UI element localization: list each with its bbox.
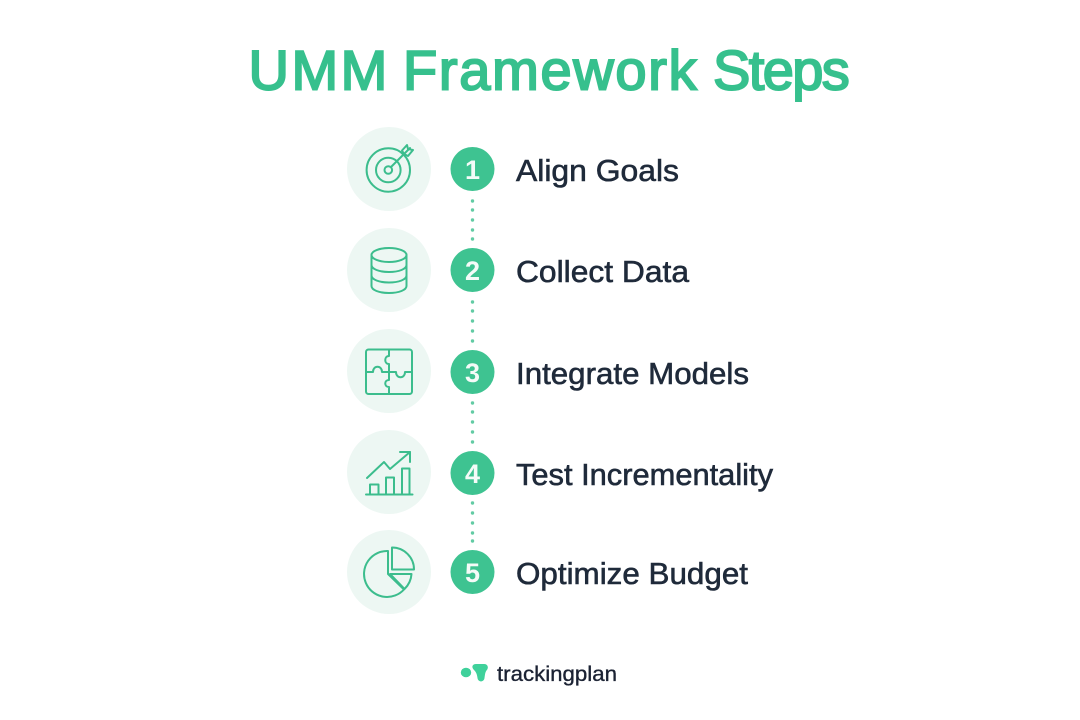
icon: target with arrow [347,127,431,211]
connector dots 2 to 3 [471,300,474,343]
number badge 3 [450,350,494,394]
number badge 5: 5 [465,558,480,588]
title: Framework [403,38,698,102]
step 4: test incrementality [347,430,773,514]
step 2: collect data [347,228,690,312]
icon: rising bar chart [347,430,431,514]
number badge 5 [450,550,494,594]
step 5: optimize budget [347,530,748,614]
number badge 2 [450,248,494,292]
label: collect data: Collect Data [516,254,690,289]
title: UMM [248,38,390,102]
connector dots 4 to 5 [471,501,474,543]
number badge 1 [450,147,494,191]
step 1: align goals [347,127,679,211]
number badge 3: 3 [465,358,480,388]
label: align goals: Align Goals [516,153,679,188]
number badge 2: 2 [465,256,480,286]
icon: logo mark [461,664,488,681]
number badge 4 [450,451,494,495]
label: optimize budget: Optimize Budget [516,556,748,591]
step 3: integrate models [347,329,749,413]
number badge 4: 4 [465,459,480,489]
number badge 1: 1 [465,155,480,185]
connector dots 1 to 2 [471,199,474,241]
wordmark: trackingplan [497,663,617,686]
label: integrate models: Integrate Models [516,356,749,391]
label: test incrementality: Test Incrementality [516,457,773,492]
title: Steps [713,38,848,102]
connector dots 3 to 4 [471,401,474,444]
logo: trackingplan [461,663,617,686]
icon: pie chart [347,530,431,614]
icon: puzzle [347,329,431,413]
icon: database [347,228,431,312]
